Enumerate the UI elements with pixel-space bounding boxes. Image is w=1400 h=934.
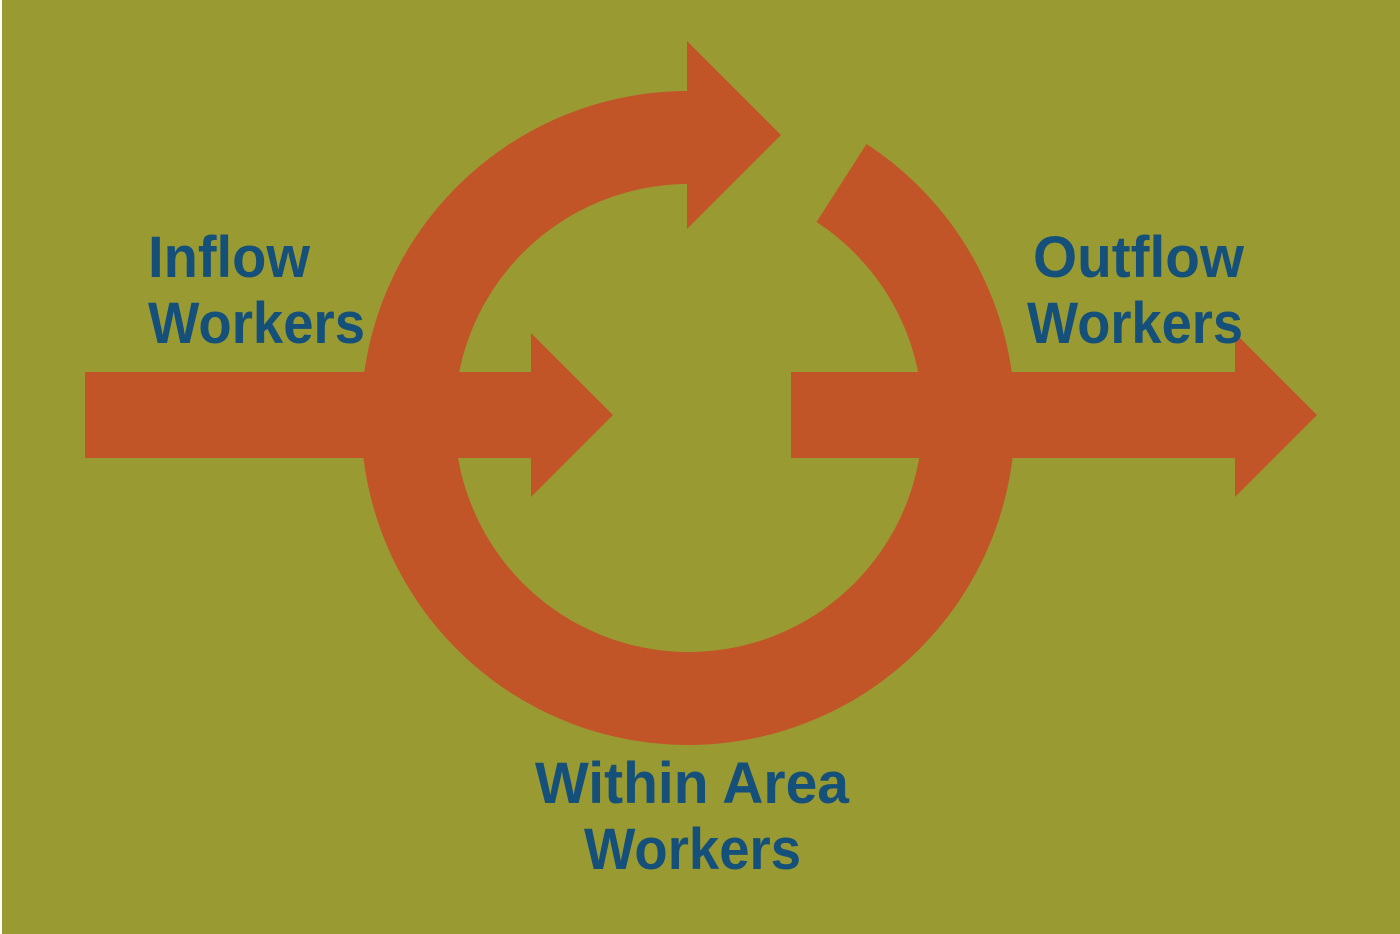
arrow: outflow: [791, 333, 1317, 497]
label: outflow workers: Workers: [1027, 291, 1243, 356]
arrow: inflow: [85, 333, 613, 497]
arrow: circular within-area flow: [361, 41, 1015, 745]
label: within area workers: Workers: [584, 817, 801, 882]
label: within area workers: Within Area: [535, 751, 850, 816]
label: within area workers: [535, 751, 850, 882]
label: outflow workers: Outflow: [1033, 225, 1245, 290]
label: outflow workers: [1027, 225, 1245, 356]
label: inflow workers: Inflow: [148, 225, 311, 290]
label: inflow workers: [148, 225, 365, 356]
label: inflow workers: Workers: [148, 291, 365, 356]
